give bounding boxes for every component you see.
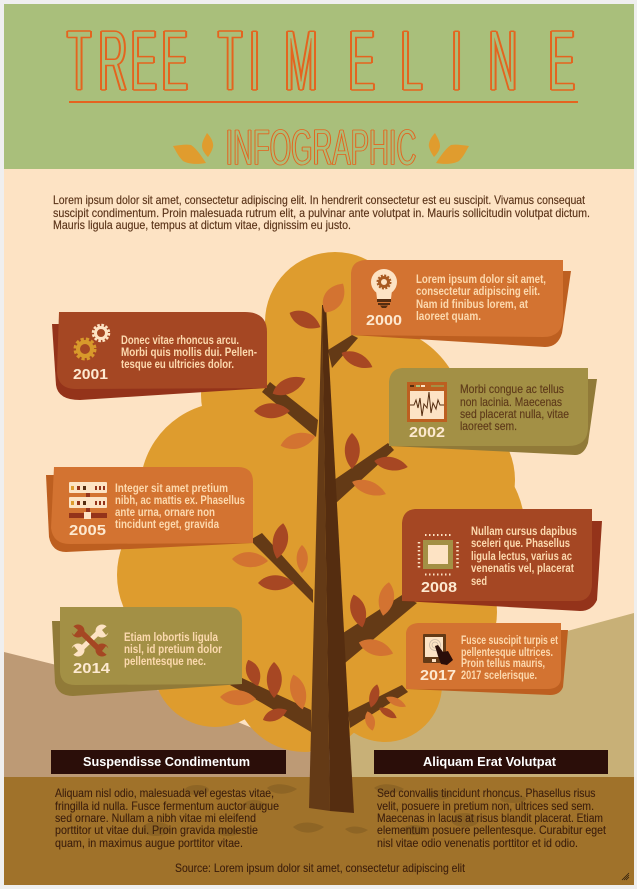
icon: light bulb [371, 269, 397, 308]
card text: sceleri que. Phasellus [471, 538, 570, 550]
heading: left column: Suspendisse Condimentum [83, 754, 250, 769]
card text: Fusce suscipit turpis et [461, 635, 558, 647]
ground [4, 777, 634, 885]
card text: Donec vitae rhoncus arcu. [121, 335, 239, 347]
icon: gears [75, 325, 109, 359]
card text [460, 382, 569, 433]
card text: 2017 scelerisque. [461, 670, 537, 682]
card: 2005 [46, 467, 253, 552]
card: 2001 [52, 312, 267, 400]
card text: Morbi quis mollis dui. Pellen- [121, 347, 257, 359]
card text [121, 335, 257, 371]
source line: Source: Lorem ipsum dolor sit amet, consectetur adipiscing elit [175, 861, 466, 875]
card text: Nullam cursus dapibus [471, 526, 577, 538]
text block: right column: velit, posuere in pretium non, ultrices sed sem. [377, 799, 594, 813]
text block: right column [377, 786, 607, 850]
tree branches [230, 335, 417, 732]
year: 2008 [421, 579, 457, 596]
fallen leaves [142, 784, 526, 836]
page background [4, 169, 634, 779]
card text: pellentesque nec. [124, 656, 206, 668]
intro text: Mauris ligula augue, tempus at dictum vitae, dignissim eu justo. [53, 218, 351, 232]
tree crown [117, 252, 525, 752]
card: 2014 [52, 607, 242, 696]
card text: tincidunt eget, gravida [115, 519, 220, 531]
text block: left column: sed ornare. Nullam a nibh vitae mi eleifend [55, 811, 256, 825]
tree trunk [309, 305, 354, 813]
card: 2008 [402, 509, 602, 611]
icon: servers [69, 482, 107, 519]
card text: laoreet sem. [460, 419, 517, 433]
text block: left column: fringilla id nulla. Fusce fermentum auctor augue [55, 799, 279, 813]
card text [416, 274, 546, 323]
intro text [53, 193, 590, 232]
card text: non lacinia. Maecenas [460, 395, 562, 409]
text block: right column: elementum posuere pellentesque. Curabitur eget [377, 823, 607, 837]
card text: sed placerat nulla, vitae [460, 407, 569, 421]
card text: consectetur adipiscing elit. [416, 286, 540, 298]
tree leaves [220, 278, 409, 732]
card text: sed [471, 576, 487, 588]
header band [4, 4, 634, 176]
text block: right column: Sed convallis tincidunt rhoncus. Phasellus risus [377, 786, 596, 800]
card text: ligula lectus, varius ac [471, 551, 572, 563]
left hill [4, 652, 330, 778]
card text: pellentesque ultrices. [461, 647, 553, 659]
card text: Proin tellus mauris, [461, 658, 545, 670]
card: 2002 [389, 368, 597, 455]
icon: monitor [407, 382, 447, 422]
card text [115, 483, 245, 531]
card text: Etiam lobortis ligula [124, 632, 219, 644]
card text: Integer sit amet pretium [115, 483, 228, 495]
text block: left column [55, 786, 279, 850]
card text [124, 632, 222, 668]
card text [461, 635, 558, 682]
text block: right column: Maecenas in lacus at risus blandit placerat. Etiam [377, 811, 603, 825]
icon: resize handle [622, 873, 629, 880]
card text: Nam id finibus lorem, at [416, 299, 528, 311]
text block: right column: nisl vitae odio venenatis porttitor et id odio. [377, 836, 578, 850]
text block: left column: porttitor ut vitae dui. Proin gravida molestie [55, 823, 258, 837]
card text [471, 526, 577, 588]
heading: right column: Aliquam Erat Volutpat [423, 754, 557, 769]
icon: tablet and hand [423, 634, 453, 665]
year: 2014 [73, 660, 111, 677]
intro text: suscipit condimentum. Proin malesuada rutrum elit, a pulvinar ante volutpat in. Mauris sollicitudin volutpat dictum. [53, 206, 590, 220]
subtitle: INFOGRAPHIC [226, 119, 416, 176]
year: 2000 [366, 312, 402, 329]
card text: venenatis vel, placerat [471, 563, 574, 575]
card text: laoreet quam. [416, 311, 481, 323]
right hill [330, 613, 634, 778]
text block: left column: quam, in maximus augue porttitor vitae. [55, 836, 243, 850]
year: 2002 [409, 424, 445, 441]
card text: ante urna, ornare non [115, 507, 215, 519]
year: 2005 [69, 522, 106, 539]
heading: right column [374, 750, 608, 774]
icon: chip [419, 535, 458, 574]
card text: Lorem ipsum dolor sit amet, [416, 274, 546, 286]
card text: tesque eu ultricies dolor. [121, 359, 234, 371]
year: 2017 [420, 667, 456, 684]
heading: left column [51, 750, 286, 774]
icon: left leaves [173, 133, 213, 164]
card: 2017 [406, 623, 568, 695]
text block: left column: Aliquam nisl odio, malesuada vel egestas vitae, [55, 786, 274, 800]
year: 2001 [73, 366, 108, 383]
icon: crossed wrenches [70, 624, 110, 656]
icon: right leaves [429, 133, 469, 164]
card text: nibh, ac mattis ex. Phasellus [115, 495, 245, 507]
card: 2000 [351, 260, 571, 347]
card text: Morbi congue ac tellus [460, 382, 564, 396]
card text: nisl, id pretium dolor [124, 644, 222, 656]
title: TREETIMELINE [67, 14, 575, 109]
